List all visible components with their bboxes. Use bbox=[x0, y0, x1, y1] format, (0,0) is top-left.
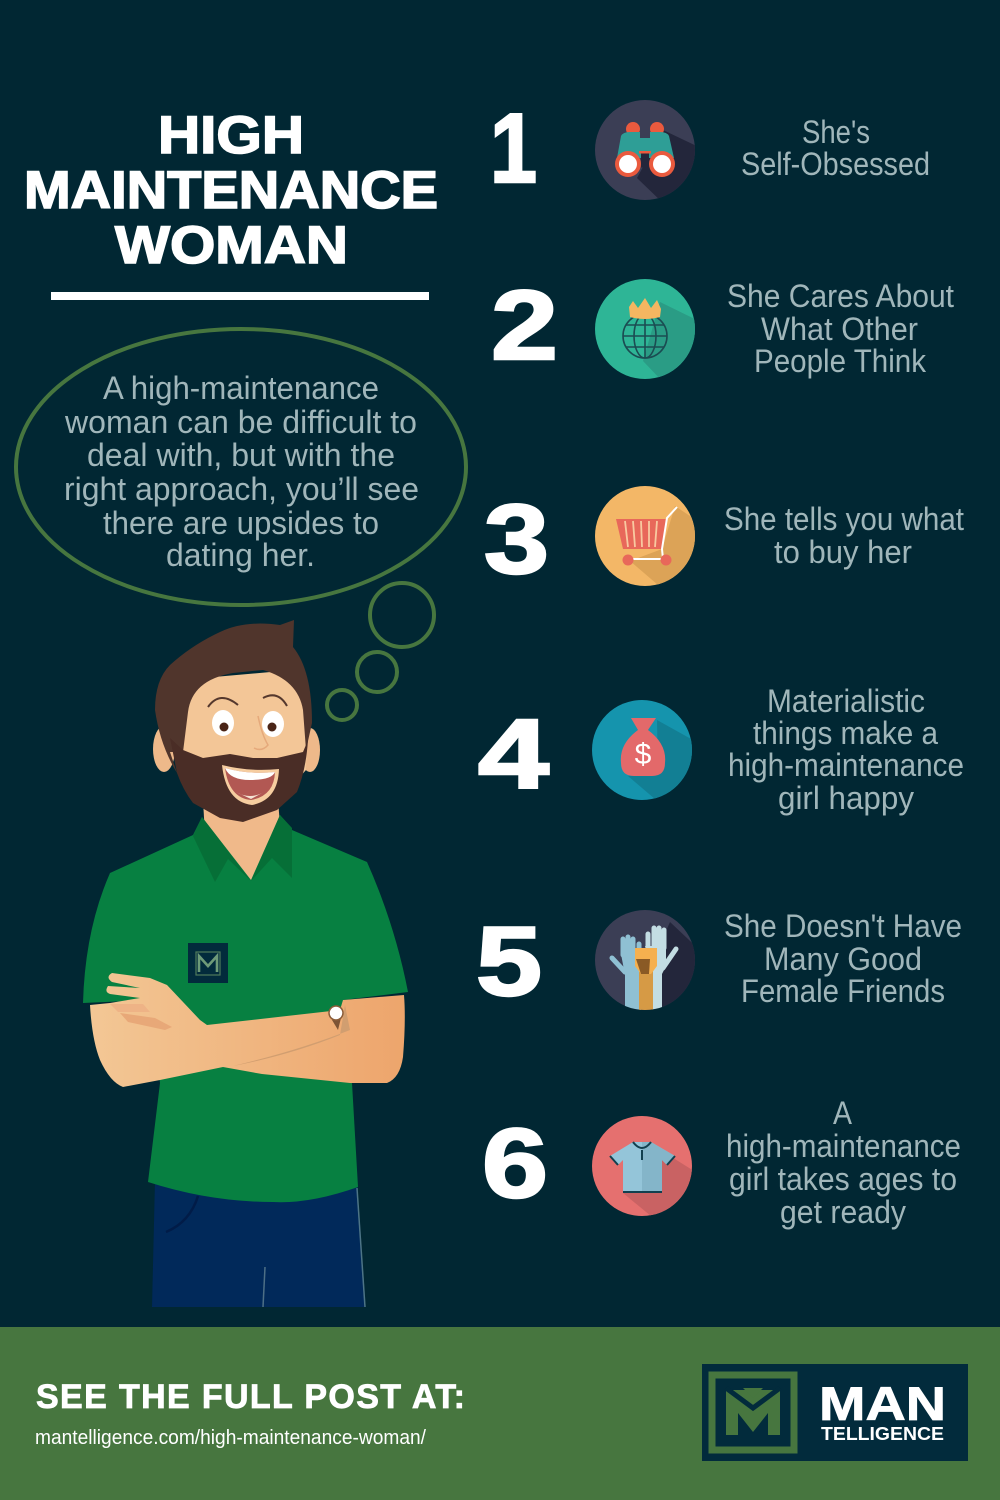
hair bbox=[155, 620, 312, 773]
bubble text bbox=[64, 370, 419, 573]
label: girl happy bbox=[778, 780, 914, 816]
label: Materialistic bbox=[767, 683, 925, 719]
neck bbox=[203, 800, 280, 882]
item 5 bbox=[478, 910, 961, 1010]
call to action: SEE THE FULL POST AT: bbox=[36, 1378, 465, 1416]
label bbox=[726, 1095, 961, 1230]
label: She Cares About bbox=[727, 278, 954, 314]
label: She Doesn't Have bbox=[724, 908, 962, 944]
label: Self-Obsessed bbox=[741, 146, 930, 182]
bubble text: A high-maintenance bbox=[103, 370, 379, 406]
label bbox=[727, 278, 954, 379]
logo: TELLIGENCE bbox=[821, 1424, 944, 1444]
label: Many Good bbox=[764, 941, 922, 977]
label: She's bbox=[802, 114, 870, 150]
icon: shopping cart bbox=[595, 486, 695, 586]
number 5: 5 bbox=[476, 906, 542, 1016]
watch bbox=[329, 1006, 343, 1030]
item 3 bbox=[484, 484, 964, 594]
icon: shirt bbox=[592, 1116, 692, 1216]
number 1: 1 bbox=[490, 93, 537, 203]
item 1 bbox=[494, 100, 928, 200]
label: She tells you what bbox=[724, 501, 964, 537]
label: People Think bbox=[754, 343, 927, 379]
label: A bbox=[833, 1095, 853, 1131]
bubble text: woman can be difficult to bbox=[64, 404, 417, 440]
thought circles bbox=[327, 583, 434, 720]
label: high-maintenance bbox=[728, 747, 964, 783]
label: to buy her bbox=[774, 534, 912, 570]
label: girl takes ages to bbox=[729, 1161, 957, 1197]
logo: MAN bbox=[819, 1377, 946, 1430]
face bbox=[180, 670, 308, 810]
title: MAINTENANCE bbox=[24, 161, 438, 220]
bubble text: there are upsides to bbox=[103, 505, 379, 541]
label: things make a bbox=[753, 715, 938, 751]
number 6: 6 bbox=[482, 1108, 548, 1218]
title: WOMAN bbox=[115, 216, 348, 275]
label bbox=[728, 683, 964, 816]
number 4: 4 bbox=[478, 699, 549, 809]
shirt bbox=[83, 815, 408, 1202]
label: Female Friends bbox=[741, 973, 945, 1009]
icon: money bag bbox=[592, 700, 692, 800]
trousers bbox=[152, 1180, 365, 1307]
number 2: 2 bbox=[491, 270, 558, 380]
number 3: 3 bbox=[484, 484, 549, 594]
url: mantelligence.com/high-maintenance-woman/ bbox=[35, 1427, 426, 1449]
icon: binoculars bbox=[595, 100, 695, 200]
thought bubble bbox=[16, 329, 466, 720]
bubble text: right approach, you’ll see bbox=[64, 471, 419, 507]
mouth bbox=[222, 765, 279, 805]
label bbox=[724, 501, 964, 570]
eyes and brows bbox=[208, 695, 287, 749]
item 2 bbox=[494, 279, 954, 379]
icon: globe with crown bbox=[595, 279, 695, 379]
label bbox=[724, 908, 962, 1009]
beard bbox=[170, 738, 308, 822]
bubble text: deal with, but with the bbox=[87, 437, 395, 473]
icon: money bag: $ bbox=[635, 738, 652, 771]
bubble text: dating her. bbox=[166, 537, 315, 573]
ears bbox=[153, 726, 320, 772]
label bbox=[741, 114, 930, 182]
label: get ready bbox=[780, 1194, 906, 1230]
item 6 bbox=[482, 1095, 961, 1230]
title: HIGH bbox=[158, 106, 304, 165]
bubble outline bbox=[16, 329, 466, 605]
footer band bbox=[0, 1327, 1000, 1500]
label: high-maintenance bbox=[726, 1128, 961, 1164]
item 4 bbox=[478, 683, 964, 816]
man illustration bbox=[83, 620, 408, 1307]
title bbox=[24, 106, 438, 275]
label: What Other bbox=[761, 311, 918, 347]
shirt badge bbox=[188, 943, 228, 983]
crossed arms bbox=[90, 973, 405, 1087]
logo bbox=[702, 1364, 968, 1461]
icon: raised hands bbox=[595, 910, 695, 1010]
